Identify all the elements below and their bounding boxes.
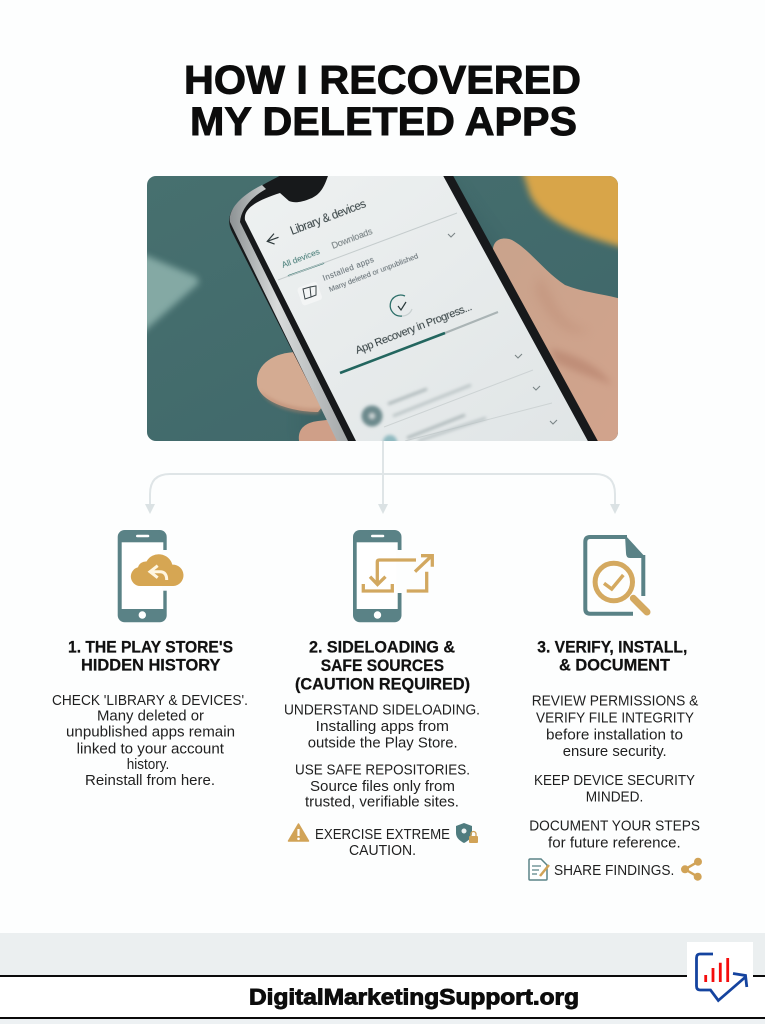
text: step 1 body: history. — [127, 756, 169, 773]
heading: step 2: SAFE SOURCES — [321, 657, 444, 675]
title — [184, 58, 581, 144]
icon: phone with cloud restore — [118, 530, 183, 622]
progress bar — [340, 312, 498, 373]
text: step 1 body: Many deleted or — [97, 708, 204, 725]
text: step 1 body: unpublished apps remain — [66, 724, 235, 741]
text: step 3 body: VERIFY FILE INTEGRITY — [536, 710, 694, 727]
icon: phone with transfer arrows — [353, 530, 432, 622]
blurred list rows — [362, 385, 486, 449]
heading: step 2: 2. SIDELOADING & — [309, 638, 455, 656]
heading: step 1: HIDDEN HISTORY — [81, 657, 220, 675]
title: HOW I RECOVERED — [184, 58, 581, 102]
list row: uninstalled apps: Installed apps — [321, 255, 375, 283]
icon: document with magnifier — [585, 535, 647, 614]
text: step 1 body: CHECK 'LIBRARY & DEVICES'. — [52, 692, 248, 709]
text: step 2 body: EXERCISE EXTREME — [315, 826, 450, 843]
text: step 2 body: outside the Play Store. — [308, 734, 458, 751]
icon: shield with lock — [456, 823, 478, 843]
spinner with check — [390, 295, 412, 316]
text: step 3 body: KEEP DEVICE SECURITY — [534, 772, 695, 789]
photo: hand holding phone showing app recovery — [147, 176, 618, 441]
panel: step 1 — [52, 530, 248, 789]
text: step 1 body: linked to your account — [77, 740, 225, 757]
screen header: Library & devices: Library & devices — [289, 198, 368, 238]
text: step 3 body: before installation to — [546, 726, 683, 743]
heading: step 3: & DOCUMENT — [559, 657, 670, 675]
text: step 3 body: REVIEW PERMISSIONS & — [532, 693, 698, 710]
phone body — [229, 170, 600, 449]
title: MY DELETED APPS — [190, 100, 577, 144]
heading: step 1: 1. THE PLAY STORE'S — [68, 638, 233, 656]
icon: share — [681, 858, 702, 881]
phone screen — [245, 170, 590, 449]
text: step 2 body: trusted, verifiable sites. — [305, 794, 459, 811]
panel: step 2 — [284, 530, 480, 859]
text: step 2 body — [284, 701, 480, 859]
app recovery text: App Recovery in Progress... — [354, 301, 474, 357]
logo — [687, 942, 753, 1014]
text: step 3 body: for future reference. — [548, 835, 681, 852]
heading: step 3: 3. VERIFY, INSTALL, — [537, 638, 687, 656]
text: step 2 body: CAUTION. — [349, 842, 416, 859]
heading: step 3 — [537, 638, 687, 675]
icon: notes document — [529, 859, 549, 880]
heading: step 1 — [68, 638, 233, 675]
text: step 3 body: ensure security. — [563, 743, 667, 760]
text: step 3 body: MINDED. — [586, 789, 643, 806]
connector arrows — [145, 441, 620, 514]
panel: step 3 — [529, 535, 702, 881]
phone screen: Downloads — [330, 226, 374, 251]
text: step 2 body: Installing apps from — [316, 718, 449, 735]
footer website text: DigitalMarketingSupport.org — [249, 984, 579, 1010]
text: step 1 body: Reinstall from here. — [85, 772, 215, 789]
text: step 3 body — [529, 693, 700, 879]
heading: step 2 — [295, 638, 470, 693]
icon: warning triangle — [288, 824, 308, 841]
phone screen: Many deleted or unpublished — [327, 251, 419, 294]
text: step 3 body: SHARE FINDINGS. — [554, 862, 674, 879]
text: step 2 body: Source files only from — [310, 778, 455, 795]
tabs: All devices — [280, 246, 321, 270]
footer band — [0, 933, 765, 1024]
heading: step 2: (CAUTION REQUIRED) — [295, 675, 470, 693]
text: step 2 body: UNDERSTAND SIDELOADING. — [284, 701, 480, 718]
text: step 3 body: DOCUMENT YOUR STEPS — [529, 818, 700, 835]
text: step 1 body — [52, 692, 248, 789]
hand: fingers behind phone — [257, 238, 625, 445]
text: step 2 body: USE SAFE REPOSITORIES. — [295, 761, 470, 778]
